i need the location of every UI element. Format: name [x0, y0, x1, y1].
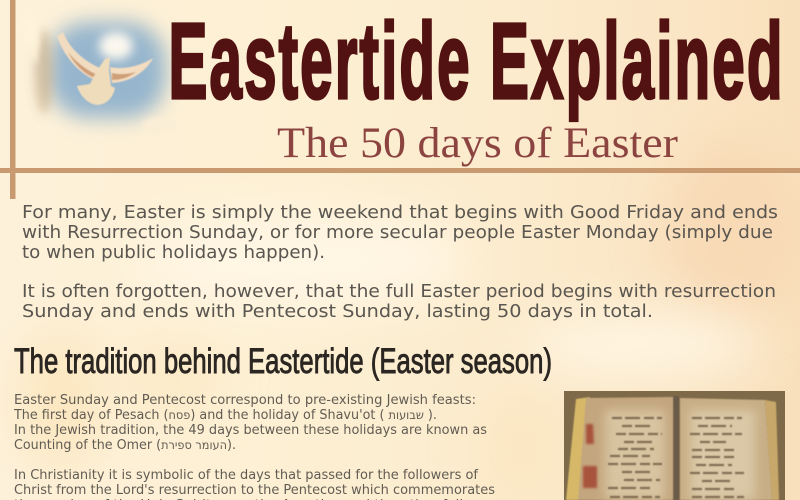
image: open Hebrew manuscript [564, 391, 785, 500]
tradition text block [13, 392, 504, 500]
intro paragraph one: For many, Easter is simply the weekend that begins with Good Friday and ends [22, 202, 778, 223]
intro paragraph one: to when public holidays happen). [22, 242, 325, 263]
intro paragraph one [22, 202, 778, 263]
title: Eastertide Explained [168, 1, 782, 122]
vertical rule [10, 0, 16, 199]
tradition text block: In the Jewish tradition, the 49 days between these holidays are known as [14, 422, 487, 438]
subtitle: The 50 days of Easter [277, 120, 678, 167]
section heading: The tradition behind Eastertide (Easter season) [14, 342, 552, 381]
tradition text block: Easter Sunday and Pentecost correspond to pre-existing Jewish feasts: [14, 392, 476, 408]
dove [57, 32, 153, 105]
intro paragraph two: It is often forgotten, however, that the full Easter period begins with resurrection [22, 281, 776, 302]
tradition text block: In Christianity it is symbolic of the days that passed for the followers of [14, 467, 479, 483]
tradition text block: The first day of Pesach (פסח) and the holiday of Shavu'ot ( שבועות ). [13, 407, 437, 423]
image: dove in blue sky [22, 15, 178, 134]
tradition text block: Christ from the Lord's resurrection to the Pentecost which commemorates [14, 482, 495, 498]
horizontal rule [0, 168, 800, 173]
intro paragraph two: Sunday and ends with Pentecost Sunday, lasting 50 days in total. [22, 301, 653, 322]
intro paragraph one: with Resurrection Sunday, or for more secular people Easter Monday (simply due [22, 222, 773, 243]
tradition text block: Counting of the Omer (העומר ספירת). [14, 437, 236, 453]
intro paragraph two [22, 281, 776, 322]
